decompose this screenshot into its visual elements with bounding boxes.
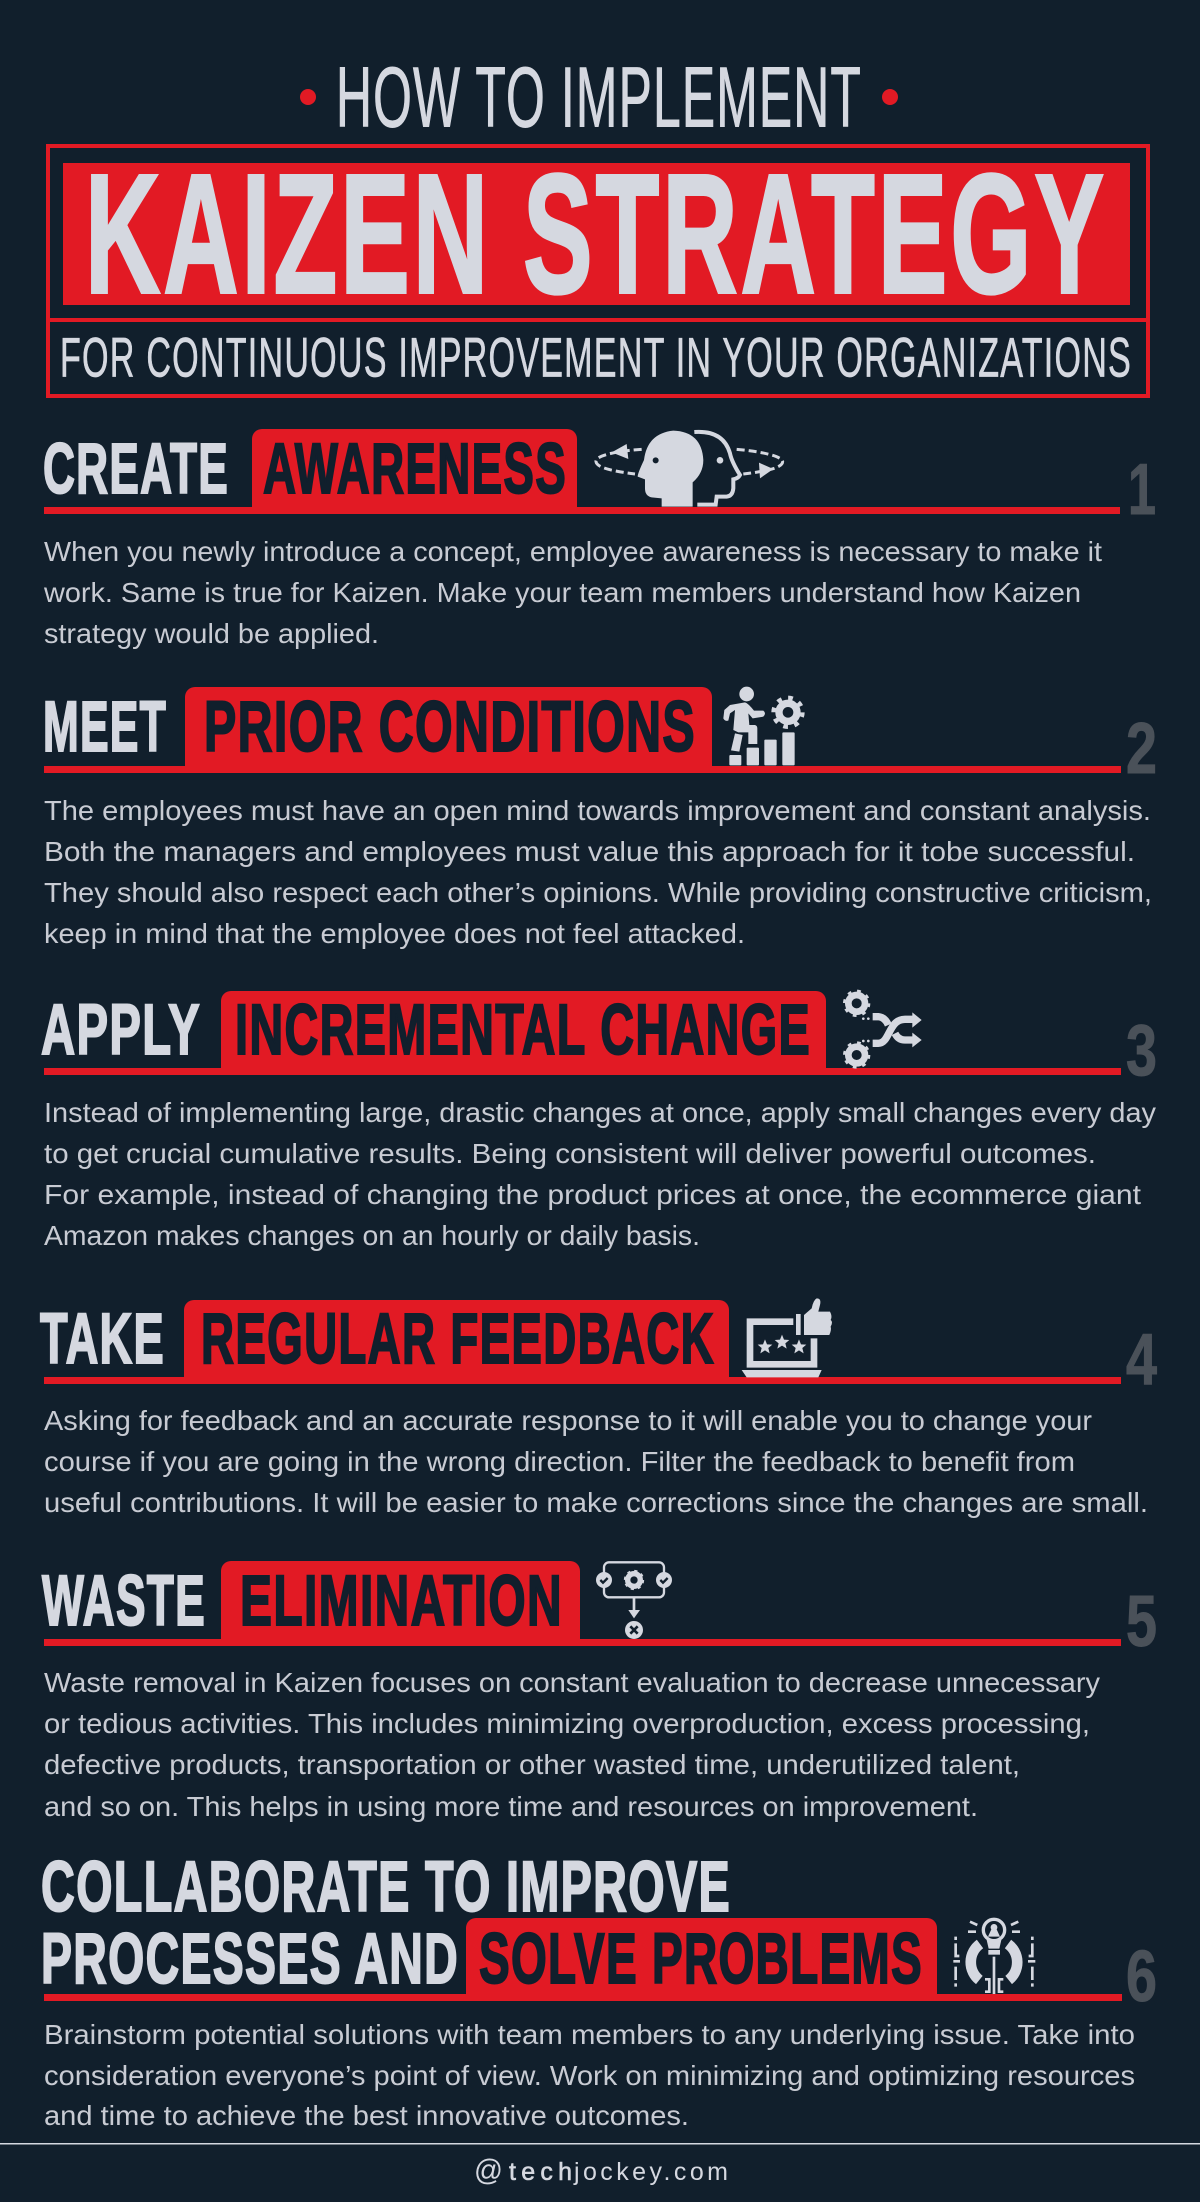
body text 1: work. Same is true for Kaizen. Make your team members understand how Kaizen <box>43 577 1081 608</box>
title block <box>48 50 1148 396</box>
body text 5 <box>44 1667 1100 1822</box>
body text 6: Brainstorm potential solutions with team members to any underlying issue. Take into <box>44 2019 1135 2050</box>
body text 1 <box>43 536 1102 649</box>
logo and website <box>474 2154 728 2187</box>
icon: laptop with stars and thumbs up <box>742 1298 832 1377</box>
logo and website: tech <box>509 2158 572 2186</box>
panel: step 3 apply incremental change <box>41 991 1157 1251</box>
logo and website: jockey.com <box>573 2158 728 2186</box>
number 3: 3 <box>1126 1011 1157 1091</box>
body text 3: to get crucial cumulative results. Being consistent will deliver powerful outcomes. <box>44 1138 1096 1169</box>
body text 3: Amazon makes changes on an hourly or daily basis. <box>44 1220 700 1251</box>
icon: lightbulb, gear and collaboration <box>953 1919 1035 1994</box>
heading: meet prior conditions <box>43 687 1121 773</box>
body text 1: When you newly introduce a concept, employee awareness is necessary to make it <box>44 536 1102 567</box>
body text 2: Both the managers and employees must value this approach for it tobe successful. <box>44 836 1135 867</box>
footer <box>0 2143 1200 2187</box>
number 6: 6 <box>1126 1937 1157 2017</box>
heading: apply incremental change: APPLY <box>41 991 201 1070</box>
body text 4: useful contributions. It will be easier to make corrections since the changes are small. <box>44 1487 1148 1518</box>
heading: take regular feedback <box>40 1300 1121 1384</box>
icon: two heads rotating <box>596 431 783 507</box>
heading: take regular feedback: REGULAR FEEDBACK <box>201 1300 715 1379</box>
heading: apply incremental change: INCREMENTAL CHANGE <box>235 991 811 1070</box>
panel: step 5 waste elimination <box>42 1561 1157 1822</box>
heading: collaborate to improve processes and solve problems: PROCESSES AND <box>41 1920 459 1999</box>
body text 3: Instead of implementing large, drastic changes at once, apply small changes every day <box>44 1097 1156 1128</box>
heading: create awareness: CREATE <box>43 430 229 509</box>
body text 4: course if you are going in the wrong direction. Filter the feedback to benefit from <box>44 1446 1075 1477</box>
panel: step 2 meet prior conditions <box>43 687 1157 949</box>
panel: step 4 take regular feedback <box>40 1298 1157 1518</box>
number 5: 5 <box>1126 1582 1157 1662</box>
body text 2: keep in mind that the employee does not feel attacked. <box>44 918 745 949</box>
body text 3 <box>44 1097 1156 1251</box>
body text 2 <box>44 795 1152 949</box>
body text 2: The employees must have an open mind towards improvement and constant analysis. <box>44 795 1151 826</box>
heading: waste elimination: WASTE <box>42 1562 206 1641</box>
outer title frame <box>48 146 1148 396</box>
heading: take regular feedback: TAKE <box>40 1300 165 1379</box>
number 2: 2 <box>1126 709 1157 789</box>
icon: process flow with gear and cross <box>596 1562 672 1639</box>
logo and website: @ <box>474 2154 503 2187</box>
body text 1: strategy would be applied. <box>44 618 379 649</box>
number 4: 4 <box>1126 1320 1157 1400</box>
heading: collaborate to improve processes and solve problems: COLLABORATE TO IMPROVE <box>41 1848 731 1927</box>
heading: waste elimination: ELIMINATION <box>240 1562 563 1641</box>
body text 6: and time to achieve the best innovative outcomes. <box>44 2100 689 2131</box>
heading: meet prior conditions: MEET <box>43 688 167 767</box>
body text 2: They should also respect each other’s opinions. While providing constructive criticism, <box>44 877 1152 908</box>
panel: step 6 collaborate and solve problems <box>41 1848 1157 2131</box>
heading: collaborate to improve processes and solve problems: SOLVE PROBLEMS <box>479 1920 923 1999</box>
body text 6 <box>44 2019 1135 2131</box>
body text 5: or tedious activities. This includes minimizing overproduction, excess processing, <box>44 1708 1090 1739</box>
body text 4: Asking for feedback and an accurate response to it will enable you to change your <box>44 1405 1092 1436</box>
panel: step 1 create awareness <box>43 429 1156 649</box>
heading: meet prior conditions: PRIOR CONDITIONS <box>204 688 696 767</box>
icon: climbing steps with gear <box>723 687 802 765</box>
body text 5: Waste removal in Kaizen focuses on constant evaluation to decrease unnecessary <box>44 1667 1100 1698</box>
body text 5: defective products, transportation or other wasted time, underutilized talent, <box>44 1749 1020 1780</box>
heading: create awareness <box>43 429 1120 514</box>
body text 5: and so on. This helps in using more time and resources on improvement. <box>44 1791 978 1822</box>
title line: how to implement <box>300 50 898 146</box>
heading: waste elimination <box>42 1561 1121 1646</box>
body text 6: consideration everyone’s point of view. Work on minimizing and optimizing resources <box>44 2060 1135 2091</box>
heading: collaborate to improve processes and solve problems <box>41 1848 1122 2001</box>
body text 3: For example, instead of changing the product prices at once, the ecommerce giant <box>44 1179 1141 1210</box>
number 1: 1 <box>1128 450 1156 530</box>
body text 4 <box>44 1405 1148 1518</box>
heading: create awareness: AWARENESS <box>263 430 567 509</box>
icon: gears and shuffle arrows <box>845 991 922 1067</box>
